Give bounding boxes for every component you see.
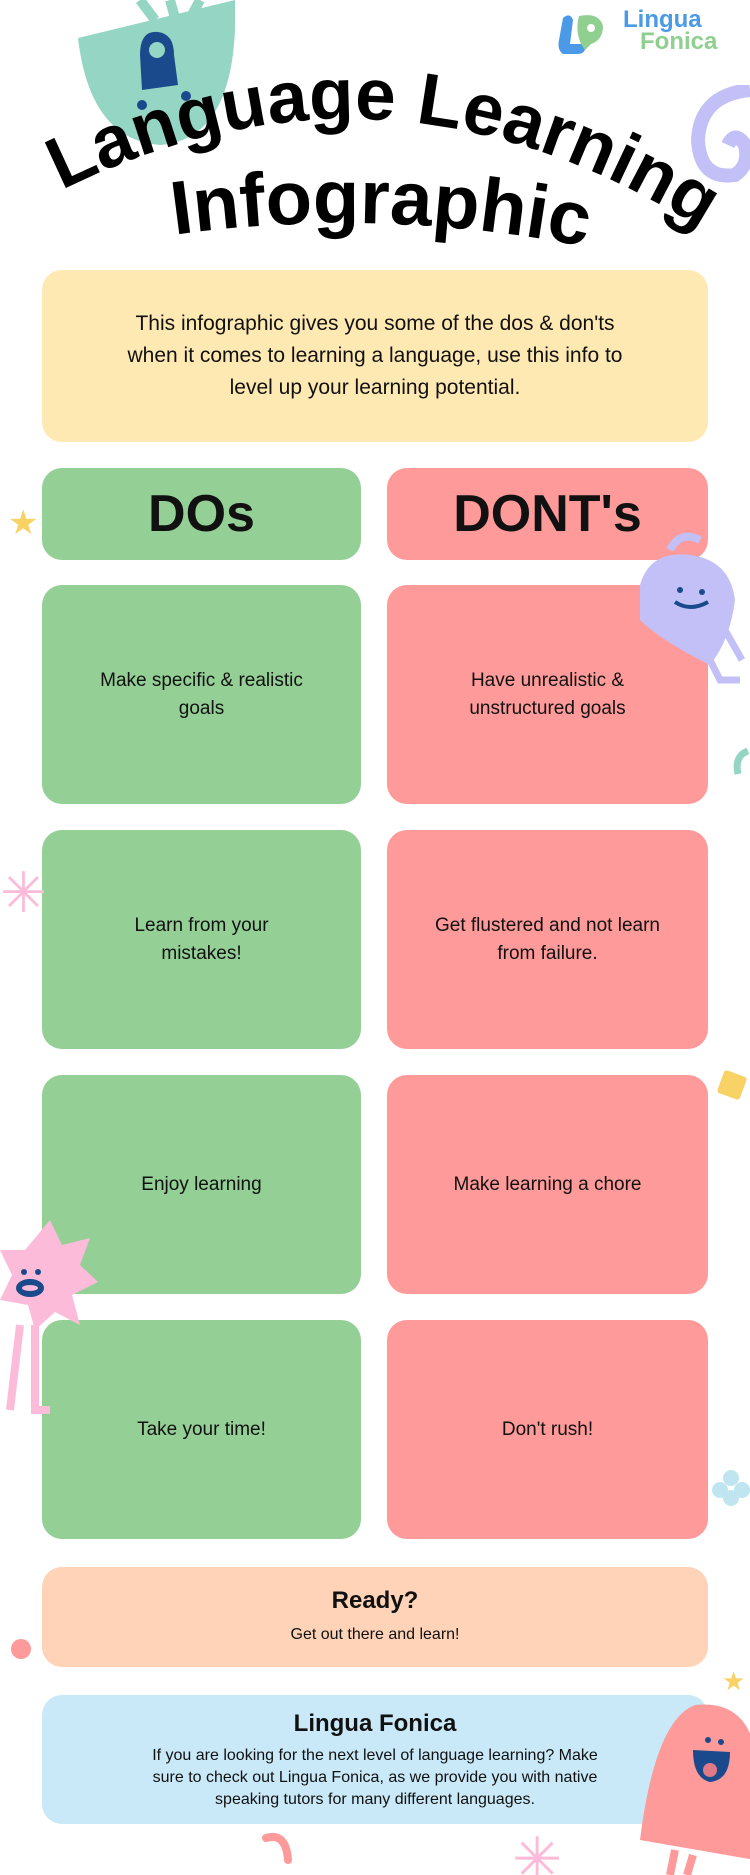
card: do 3 [42,1075,361,1294]
lingua fonica box [42,1695,708,1824]
title: Language Learning [44,74,717,234]
card: dont 4 [387,1320,708,1539]
decoration: yellow star: ★ [8,504,38,542]
logo: Lingua Fonica [558,6,718,55]
decoration: teal arc [734,748,750,775]
card: dont 2 [387,830,708,1049]
card: dont 1: Have unrealistic & unstructured goals [469,670,626,718]
card: dont 3: Make learning a chore [454,1174,642,1194]
decoration: light blue flower [712,1470,750,1506]
decoration: purple spiral right [691,85,750,182]
title: Infographic [172,170,588,244]
ready text: Get out there and learn! [290,1626,460,1643]
logo: Lingua Fonica: Lingua [623,6,702,33]
decoration: red dot [11,1639,31,1659]
card: do 1: Make specific & realistic goals [100,670,303,718]
card: dont 4: Don't rush! [502,1418,593,1440]
ready heading: Ready? [332,1587,418,1614]
lingua heading: Lingua Fonica [294,1710,456,1736]
ready box [42,1567,708,1667]
card: do 1 [42,585,361,804]
card: do 3: Enjoy learning [141,1174,262,1194]
heading: DONT's [387,468,708,560]
card: dont 2: Get flustered and not learn from failure. [435,914,660,964]
card: do 4: Take your time! [137,1418,266,1440]
decoration: yellow star small: ★ [722,1666,745,1696]
intro box [42,270,708,442]
card: do 2 [42,830,361,1049]
card: dont 3 [387,1075,708,1294]
heading: DOs [42,468,361,560]
decoration: yellow square [717,1070,747,1100]
intro box: This infographic gives you some of the dos & don'ts when it comes to learning a language, use this info to level up your learning potential. [128,312,622,399]
heading: DOs: DOs [148,485,255,543]
decoration: teal blob top-left [78,0,235,145]
card: dont 1 [387,585,708,804]
decoration: red arc bottom [262,1832,292,1864]
lingua text: If you are looking for the next level of language learning? Make sure to check out Lingua Fonica, as we provide you with native speaking tutors for many different languages. [152,1746,598,1808]
card: do 4 [42,1320,361,1539]
card: do 2: Learn from your mistakes! [134,914,269,964]
decoration: pink spiky character [0,1220,98,1414]
heading: DONT's: DONT's [453,485,642,543]
decoration: pink ghost character [640,1704,750,1875]
decoration: pink asterisk: ✳ [0,861,47,924]
decoration: purple character [640,532,745,684]
logo: Lingua Fonica: Fonica [640,28,717,55]
